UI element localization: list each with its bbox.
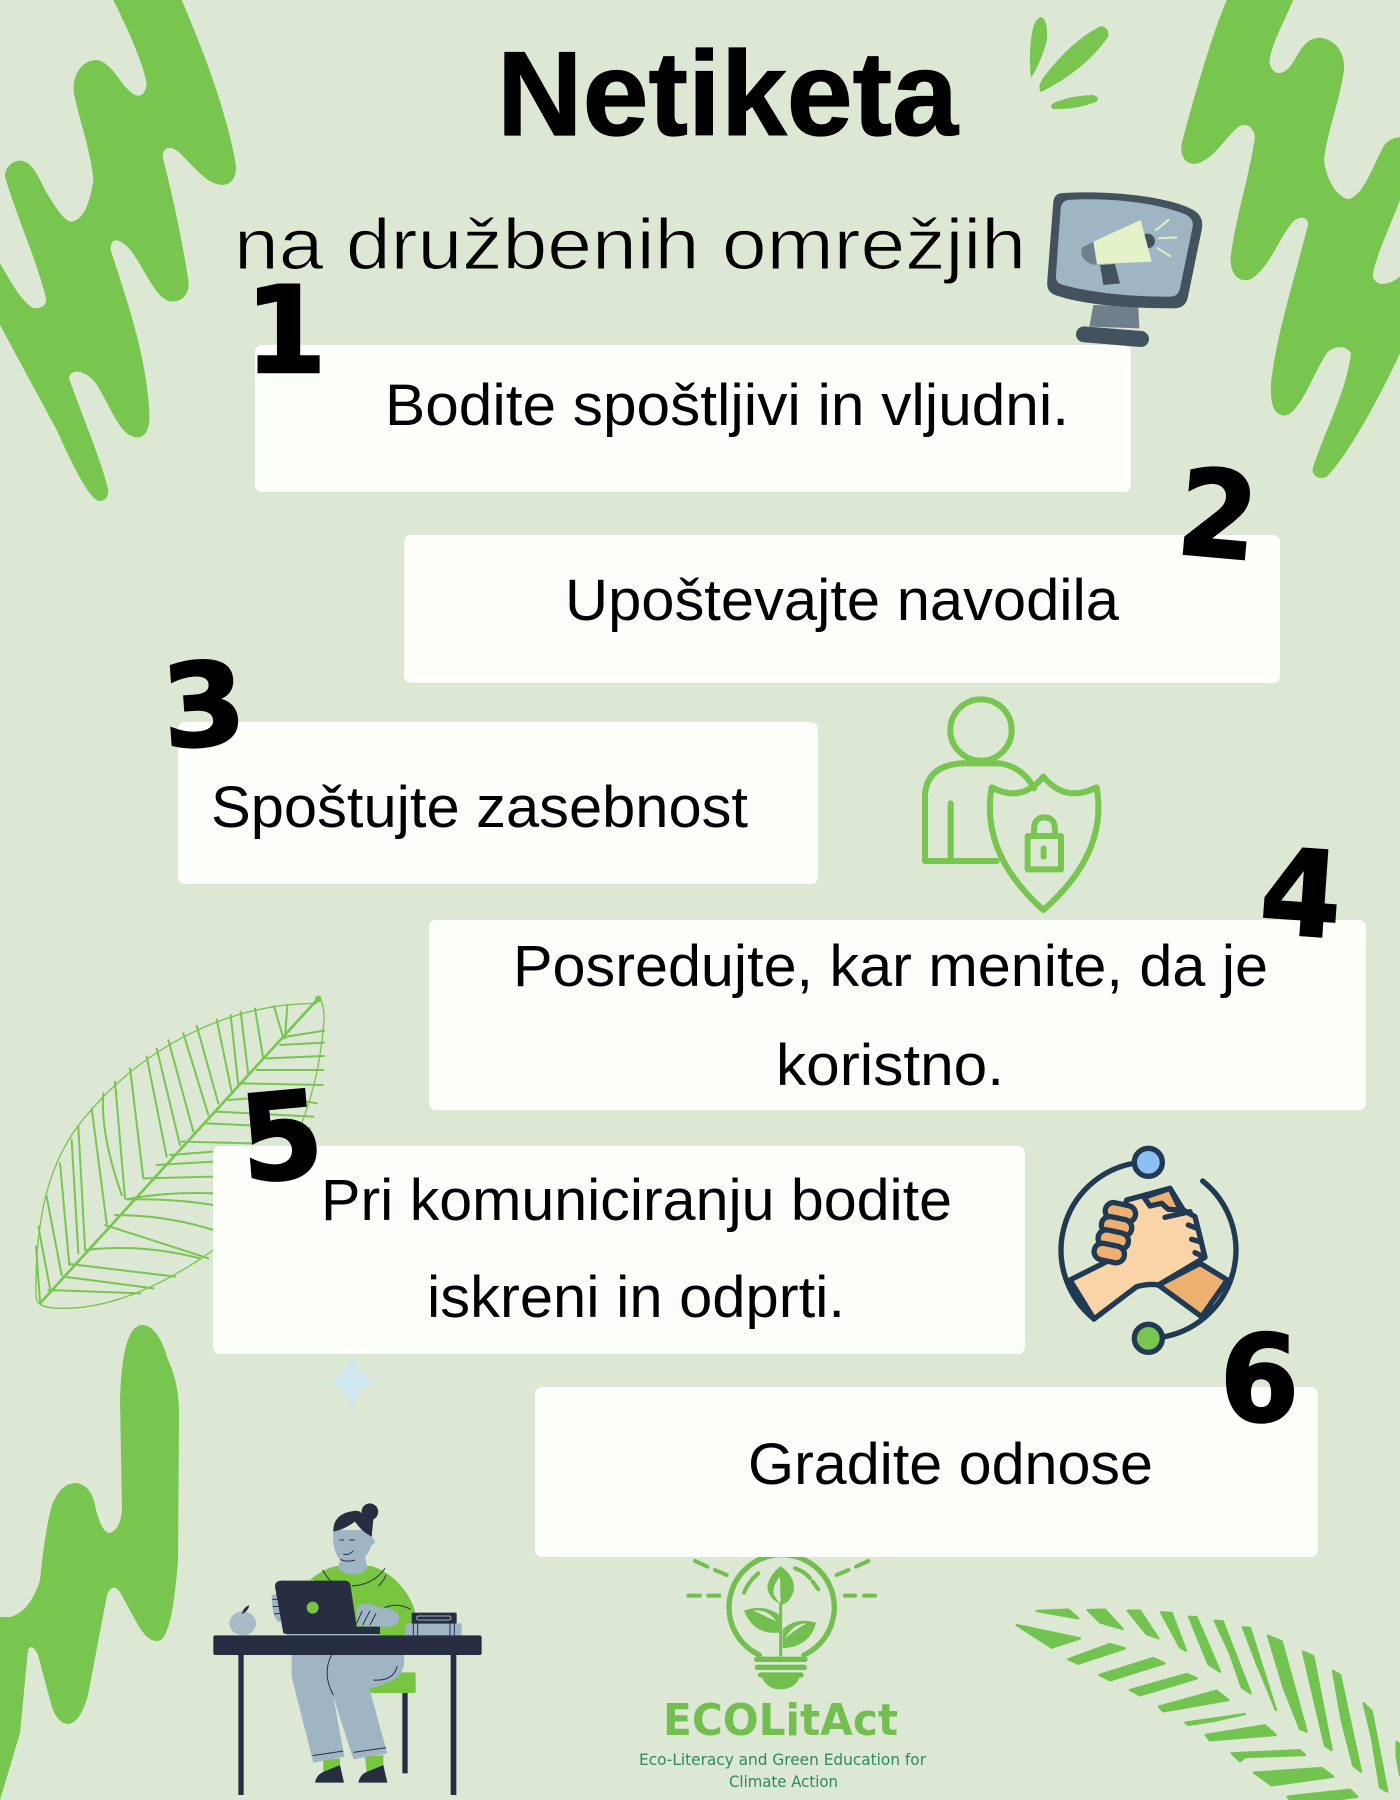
card 2 — [404, 535, 1280, 683]
card 1 — [255, 345, 1131, 492]
decorative sparkle — [327, 1350, 376, 1414]
text: rule 3: Spoštujte zasebnost — [211, 775, 748, 840]
illustration: person at desk with laptop — [213, 1503, 482, 1795]
decorative outline leaf — [36, 996, 324, 1308]
icon: handshake in ring — [1061, 1148, 1236, 1352]
title: Netiketa — [497, 27, 959, 161]
logo tagline: Climate Action — [729, 1772, 838, 1791]
number 5: 5 — [234, 1066, 329, 1211]
decorative blob: top left — [0, 0, 236, 501]
logo wordmark: ECOLitAct: ECOLitAct — [663, 1695, 898, 1746]
text: rule 5: iskreni in odprti. — [427, 1265, 845, 1330]
number 1: 1 — [245, 261, 326, 400]
card 3 — [178, 722, 818, 884]
icon: monitor with megaphone — [1047, 192, 1202, 339]
subtitle: na družbenih omrežjih — [234, 206, 1026, 285]
decorative blob: top right — [1181, 0, 1400, 478]
number 4: 4 — [1256, 822, 1346, 966]
card 6 — [535, 1387, 1318, 1557]
text: rule 2: Upoštevajte navodila — [565, 568, 1120, 633]
card 5 — [213, 1146, 1025, 1354]
text: rule 1: Bodite spoštljivi in vljudni. — [385, 373, 1069, 438]
number 6: 6 — [1220, 1311, 1299, 1450]
icon: person with shield and lock — [925, 699, 1098, 910]
text: rule 4: koristno. — [776, 1033, 1004, 1098]
card 4 — [429, 920, 1366, 1110]
text: rule 4 — [513, 934, 1268, 1098]
text: rule 5: Pri komuniciranju bodite — [321, 1168, 952, 1233]
number 3: 3 — [158, 636, 250, 775]
text: rule 6: Gradite odnose — [748, 1432, 1153, 1497]
number 2: 2 — [1172, 444, 1263, 588]
logo: lightbulb with plant — [688, 1555, 875, 1689]
logo tagline — [639, 1750, 926, 1791]
decorative blob: bottom left — [0, 1325, 179, 1800]
logo tagline: Eco-Literacy and Green Education for — [639, 1750, 926, 1769]
text: rule 4: Posredujte, kar menite, da je — [513, 934, 1268, 999]
decorative fern: bottom right — [1017, 1610, 1400, 1800]
decorative leaf sprig: top — [1030, 17, 1108, 109]
text: rule 5 — [321, 1168, 952, 1330]
